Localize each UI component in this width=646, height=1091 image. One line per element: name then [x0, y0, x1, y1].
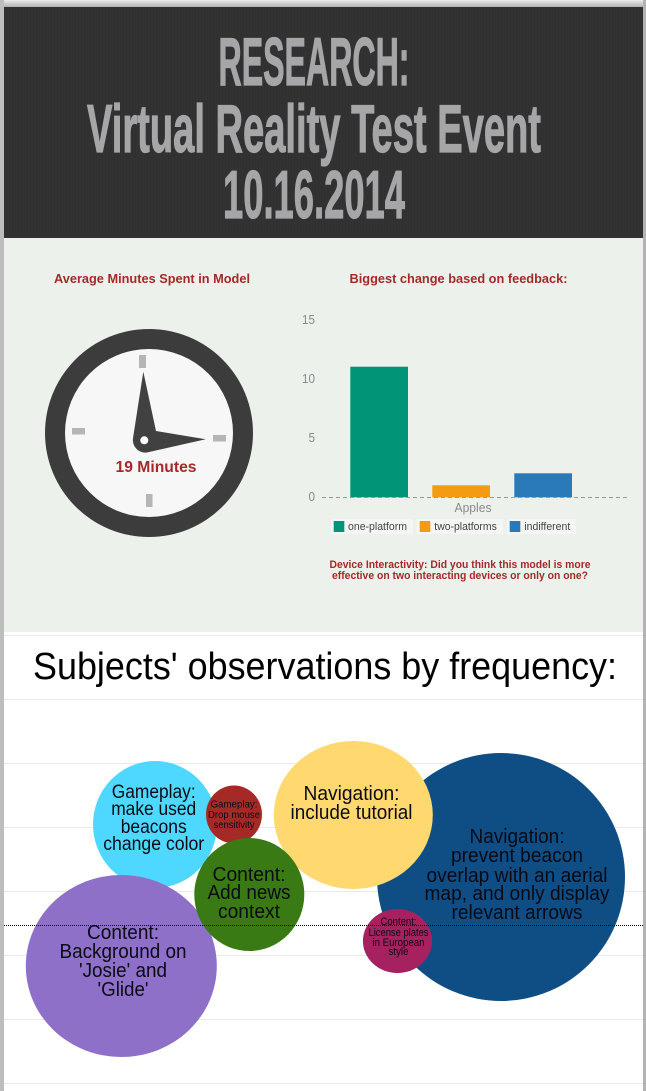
bubble: add news context [194, 838, 304, 951]
chart caption: Device Interactivity: Did you think this model is more [330, 559, 590, 571]
bubble: prevent beacon overlap: Navigation: [470, 826, 564, 848]
bubble: include tutorial: Navigation: [304, 783, 400, 805]
bubble: include tutorial [274, 741, 433, 889]
panel: metrics [4, 238, 643, 632]
chart legend: two-platforms [434, 521, 497, 533]
chart legend [331, 519, 576, 534]
chart legend: one-platform [348, 521, 407, 533]
clock label: 19 Minutes [116, 459, 197, 476]
title: 10.16.2014 [223, 157, 405, 233]
bubble: make used beacons change color [93, 761, 217, 888]
title [87, 24, 541, 233]
bubble: license plates: Content: [380, 916, 416, 928]
chart legend: indifferent [524, 521, 570, 533]
bubble: background on Josie and Glide: Content: [87, 922, 159, 944]
bar chart [302, 312, 628, 534]
bubble: make used beacons change color: make used [111, 798, 196, 820]
heading: biggest change: Biggest change based on feedback: [350, 272, 568, 286]
bar chart: 5 [308, 430, 315, 445]
bubble: drop mouse sensitivity: Drop mouse [208, 809, 260, 821]
bubble: prevent beacon overlap [377, 753, 625, 1001]
bubble chart [26, 741, 625, 1057]
bubble: license plates: style [388, 946, 408, 958]
chart caption: effective on two interacting devices or only on one? [332, 570, 588, 582]
bar chart: 10 [302, 371, 315, 386]
bubble: drop mouse sensitivity [206, 786, 262, 844]
bar chart: 0 [308, 489, 315, 504]
bubble: prevent beacon overlap: overlap with an aerial [426, 865, 608, 887]
bubble: drop mouse sensitivity: sensitivity [214, 819, 255, 831]
bubble: license plates: in European [372, 937, 424, 949]
title: RESEARCH: [218, 24, 410, 100]
bubble: license plates [363, 909, 432, 973]
bubble: background on Josie and Glide: 'Josie' and [79, 960, 167, 982]
bubble: prevent beacon overlap: prevent beacon [451, 845, 583, 867]
bubble: prevent beacon overlap: map, and only display [424, 883, 610, 905]
bubble: background on Josie and Glide: 'Glide' [98, 979, 148, 1001]
icon: clock [45, 329, 253, 537]
chart caption [330, 559, 590, 582]
bubble: add news context: context [218, 901, 280, 923]
heading: observations: Subjects' observations by frequency: [33, 646, 617, 688]
bubble: prevent beacon overlap: relevant arrows [452, 902, 582, 924]
bubble: background on Josie and Glide: Background on [60, 941, 186, 963]
bubble: make used beacons change color: beacons [121, 816, 187, 838]
bubble: make used beacons change color: Gameplay: [112, 781, 196, 803]
header banner [4, 7, 643, 238]
bubble: drop mouse sensitivity: Gameplay: [210, 799, 258, 811]
bar chart: Apples [454, 501, 492, 515]
bubble: include tutorial: include tutorial [290, 802, 412, 824]
bubble: background on Josie and Glide [26, 875, 217, 1057]
heading: average minutes: Average Minutes Spent in Model [54, 272, 250, 286]
bubble: make used beacons change color: change color [103, 833, 205, 855]
bubble: add news context: Content: [212, 864, 286, 886]
bar chart: 15 [302, 312, 315, 327]
bubble: license plates: License plates [368, 927, 429, 939]
bubble: add news context: Add news [208, 882, 290, 904]
